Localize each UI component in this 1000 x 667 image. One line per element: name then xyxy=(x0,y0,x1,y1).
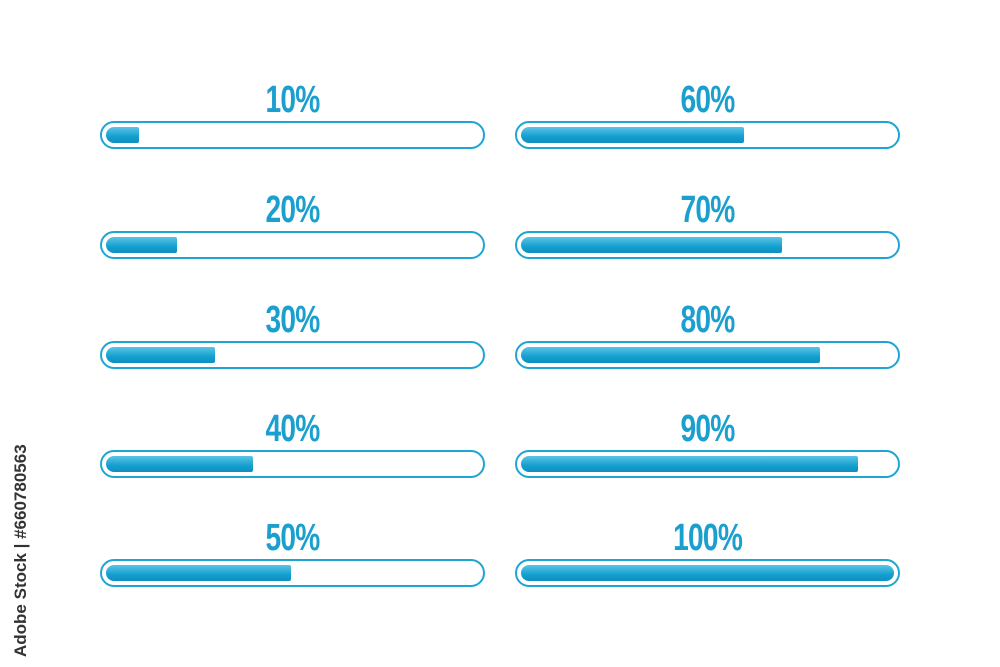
progress bar 80% xyxy=(515,299,900,369)
progress bar 30% xyxy=(100,299,485,369)
progress bar 90% xyxy=(515,408,900,478)
progress bar 90%: 90% xyxy=(681,408,735,450)
progress bar 10% xyxy=(100,79,485,149)
progress bar 70%: 70% xyxy=(681,189,735,231)
progress bar 100%: 100% xyxy=(674,517,742,559)
progress bar 40%: 40% xyxy=(266,408,320,450)
watermark text: Adobe Stock | #660780563 xyxy=(11,444,30,657)
progress bar 30%: 30% xyxy=(266,299,320,341)
progress bar 80%: 80% xyxy=(681,299,735,341)
progress bar 100% xyxy=(515,517,900,587)
progress bar 40% xyxy=(100,408,485,478)
progress bar 60%: 60% xyxy=(681,79,735,121)
progress bar 50% xyxy=(100,517,485,587)
progress bar 10%: 10% xyxy=(266,79,320,121)
progress bar 20%: 20% xyxy=(266,189,320,231)
progress bar 20% xyxy=(100,189,485,259)
progress bar 70% xyxy=(515,189,900,259)
progress bar 60% xyxy=(515,79,900,149)
progress bar 50%: 50% xyxy=(266,517,320,559)
